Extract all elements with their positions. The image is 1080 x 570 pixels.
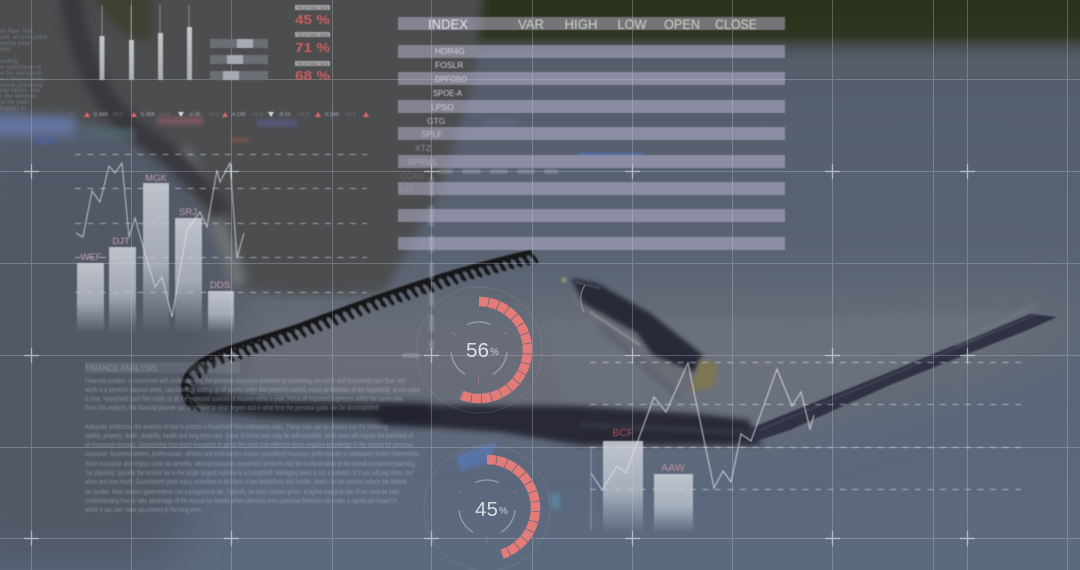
left bar and line chart: [75, 154, 367, 333]
bar labels: MGK: [145, 173, 167, 184]
finance analysis text block: Tax planning: typically the income tax is the single largest expense in a household. Managing taxes is not a question of if you will pay taxes, but: [85, 470, 413, 477]
right bar and line chart: [590, 362, 1028, 533]
table row labels: LPSO: [431, 102, 454, 112]
bars: [77, 183, 234, 333]
gauge: 56 percent: [416, 287, 542, 413]
percentage readouts: 68 %: [295, 68, 331, 83]
table header: OPEN: [664, 16, 700, 32]
finance analysis text block: in time. Household cash flow totals up all the expected sources of income within a year, minus all expected expenses within the same year.: [85, 396, 404, 403]
ticker row: +0.3: [112, 112, 123, 118]
finance analysis text block: insurance. Business owners, professionals, athletes and entertainers require specialized insurance professionals to adequately protect themselves.: [85, 451, 420, 458]
ticker row: +0.3: [252, 112, 263, 118]
block heading: [85, 362, 240, 374]
notebook dark edge: [190, 392, 430, 414]
table header: VAR: [518, 16, 544, 32]
block heading: FINANCE ANALYSIS: [85, 363, 157, 374]
trend line: [591, 363, 814, 490]
dashed gridlines: [590, 362, 1028, 490]
finance analysis text block: Financial position: is concerned with understanding the personal resources available by examining net worth and household cash flow. Net: [85, 378, 405, 385]
ticker row: -2.35: [188, 112, 201, 118]
mug side highlight: [182, 150, 240, 285]
finance analysis text block: From this analysis, the financial planner can determine to what degree and in what time the personal goals can be accomplished.: [85, 405, 380, 412]
table header: INDEX: [428, 16, 469, 32]
bar labels: DDS: [210, 280, 230, 291]
gauge: 56 percent: 56: [466, 340, 489, 362]
table header: [428, 16, 757, 32]
table header: LOW: [618, 16, 647, 32]
index table: [398, 16, 785, 250]
table row labels: XTZ: [415, 143, 431, 153]
left cropped text column: [0, 28, 47, 112]
table row labels: FOSLR: [435, 60, 463, 70]
dashed gridlines: [75, 154, 367, 292]
finance analysis text block: which it can later save you money in the long term.: [84, 507, 202, 514]
desk surface: [170, 298, 1080, 445]
bar labels: BCF: [612, 427, 634, 439]
ticker row: 5.058: [141, 112, 155, 118]
finance analysis text block: an insurance contract. Determining how much insurance to get at the most cost effective terms requires knowledge of the market for personal: [85, 442, 413, 449]
table row labels: CCAN: [400, 171, 424, 181]
right bar and line chart: AAW: [661, 462, 685, 474]
finance analysis text block: when and how much. Government gives many incentives in the form of tax deductions and credits, which can be used to reduce the lifetime: [84, 479, 407, 486]
bar labels: DJT: [112, 236, 130, 247]
pill dashes along the crosshair: [402, 169, 558, 358]
finance analysis text block: liability, property, death, disability, health and long-term care. Some of these risks may be self-insurable, while most will require the purchase of: [85, 433, 413, 440]
finance analysis text block: Adequate protection: the analysis of how to protect a household from unforeseen risks. These risks can be divided into the following:: [85, 424, 389, 431]
percentage readouts: TESTING 003: [297, 5, 329, 10]
glare streaks: [0, 116, 75, 136]
candlestick chart: [100, 5, 192, 80]
ticker row: +0.3: [345, 112, 356, 118]
ticker row: 0.3: [68, 112, 76, 118]
finance analysis text block: Understanding how to take advantage of the myriad tax breaks when planning one's personal finances can make a significant impact in: [85, 498, 397, 505]
table row labels: GTG: [427, 116, 445, 126]
table row labels: SPOE-A: [433, 88, 462, 98]
bar labels: WEF: [80, 252, 102, 263]
table header: CLOSE: [715, 16, 757, 32]
table header: HIGH: [564, 16, 598, 32]
trend line: [76, 163, 244, 317]
percentage readouts: [295, 5, 331, 83]
ticker row: +0.3: [159, 112, 170, 118]
finance analysis text block: worth is a person's balance sheet, calculated by adding up all assets under that person's control, minus all liabilities of the household, at one point: [84, 387, 420, 394]
mug body: [0, 0, 486, 295]
ticker row: -8.15: [278, 112, 291, 118]
notebook page: [540, 312, 1020, 425]
percentage readouts: TESTING 003: [297, 61, 329, 66]
gauge: 45 percent: [424, 445, 550, 570]
finance analysis text block: Since insurance also enjoys some tax benefits, utilizing insurance investment products may be a critical piece of the overall investment planning.: [85, 461, 416, 468]
ticker row: +0.3: [208, 112, 219, 118]
table row labels: SPRMS: [407, 157, 438, 167]
percentage readouts: TESTING 003: [297, 32, 329, 37]
ticker row: 0.348: [94, 112, 108, 118]
ticker row: [68, 112, 369, 118]
ticker row: +0.3: [298, 112, 309, 118]
table row bars: [398, 17, 785, 250]
ticker row: 4.145: [232, 112, 246, 118]
finance analysis text block: [84, 362, 420, 514]
gauge: 56 percent: %: [490, 347, 499, 358]
ticker row: 0.348: [325, 112, 339, 118]
stacked range bars: [210, 39, 268, 80]
percentage readouts: 71 %: [295, 40, 331, 55]
bar labels: [80, 173, 230, 291]
notebook spiral binding: [183, 252, 537, 410]
percentage readouts: 45 %: [295, 12, 331, 27]
gauge: 45 percent: 45: [475, 499, 498, 521]
pen: [561, 277, 717, 398]
finance analysis text block: tax burden. Most modern governments use a progressive tax. Typically, as one's income grows, a higher marginal rate of tax must be paid.: [85, 489, 400, 496]
table row labels: HDR4G: [435, 46, 465, 56]
table row labels: EEI: [399, 184, 413, 194]
table row labels: [399, 46, 467, 194]
bar labels: SRJ: [179, 207, 197, 218]
mug handle: [70, 0, 222, 215]
gauge: 45 percent: %: [499, 506, 508, 517]
table row labels: SPLF: [421, 129, 442, 139]
bars: [590, 447, 592, 530]
table row labels: DPFOSO: [435, 74, 467, 84]
